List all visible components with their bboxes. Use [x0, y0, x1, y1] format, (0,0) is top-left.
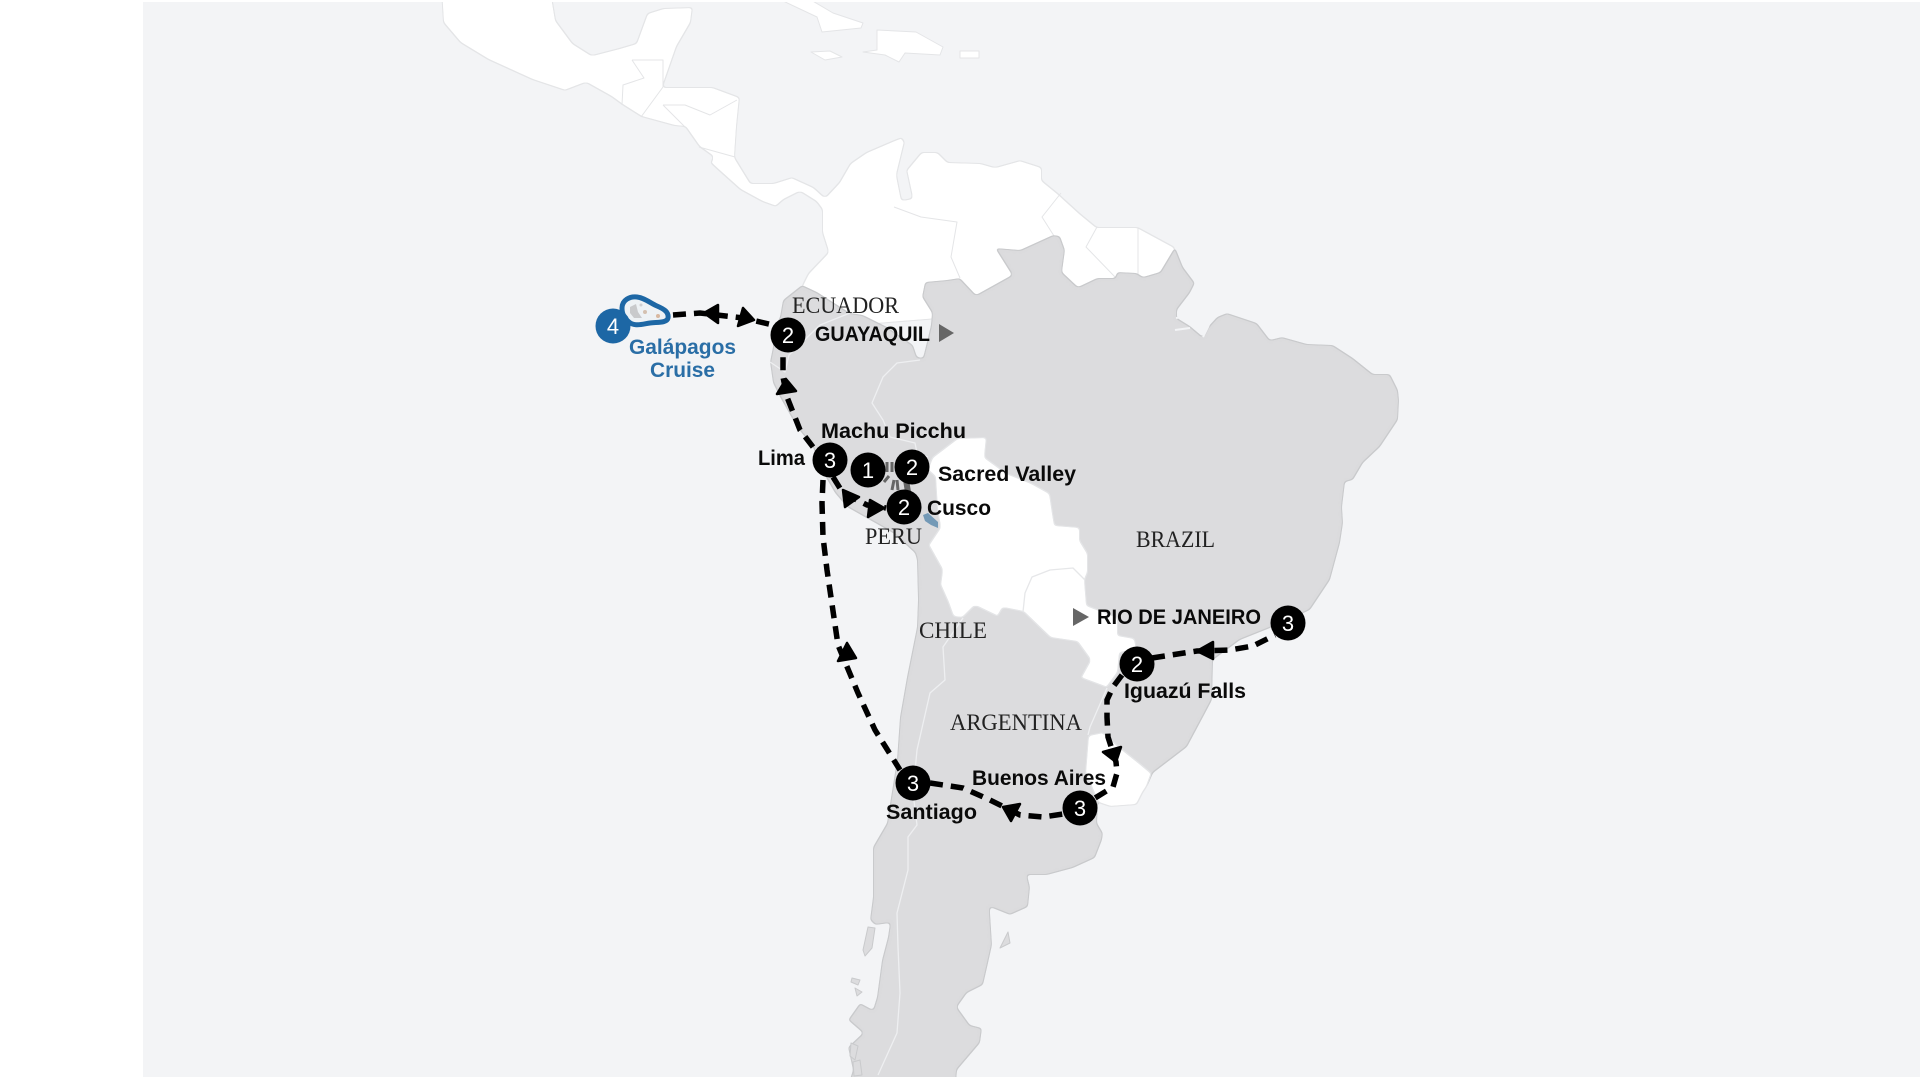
Patagonian islands: [863, 927, 1010, 956]
Lake Titicaca: [923, 513, 938, 528]
country labels: ARGENTINA: [950, 710, 1082, 735]
place labels: Sacred Valley: [938, 463, 1076, 486]
place labels: RIO DE JANEIRO: [1097, 606, 1261, 629]
country labels: BRAZIL: [1136, 527, 1215, 552]
leg: Buenos Aires to Santiago: [930, 783, 1063, 817]
leg: Iguazu to Buenos Aires: [1095, 675, 1122, 798]
South America grey countries: [770, 235, 1399, 1080]
Galapagos Cruise label: Galápagos: [629, 336, 736, 359]
Uruguay: [1085, 732, 1152, 807]
route stops: 1: [862, 458, 874, 483]
leg: Lima to Guayaquil: [783, 352, 813, 447]
place labels: [758, 323, 1261, 824]
start and end markers: [939, 324, 1089, 626]
Amazon delta channels: [1175, 316, 1210, 338]
place labels: GUAYAQUIL: [815, 323, 930, 346]
route stops: [770, 318, 1306, 826]
Central America and northern South America: [441, 0, 1175, 330]
dashed route: [673, 313, 1275, 817]
place labels: Lima: [758, 447, 805, 470]
country labels: PERU: [865, 524, 922, 549]
Galapagos Cruise label: Cruise: [650, 359, 715, 382]
route stops: 3: [907, 771, 919, 796]
route stops: 2: [898, 495, 910, 520]
icon: Galapagos islands: [596, 297, 668, 344]
Cuba: [781, 0, 863, 32]
route stops: 3: [824, 448, 836, 473]
route stops: 2: [782, 323, 794, 348]
route stops: 3: [1282, 611, 1294, 636]
route stops: 2: [906, 455, 918, 480]
Jamaica: [811, 51, 842, 60]
leg: Guayaquil to Galapagos: [673, 313, 773, 325]
place labels: Buenos Aires: [972, 767, 1106, 790]
leg: Lima to Cusco: [833, 477, 886, 508]
leg: Santiago to Lima: [822, 480, 900, 770]
leg: Rio to Iguazu: [1152, 635, 1275, 658]
place labels: Santiago: [886, 801, 977, 824]
route arrowheads: [704, 305, 1213, 821]
country borders: [770, 313, 1107, 1075]
Galapagos Cruise label: [629, 336, 736, 382]
country labels: CHILE: [919, 618, 987, 643]
Puerto Rico: [960, 51, 979, 58]
route stops: 3: [1074, 796, 1086, 821]
Hispaniola: [863, 30, 943, 62]
Bolivia and Paraguay: [927, 437, 1137, 688]
base map land: [441, 0, 1399, 1080]
route stops: 2: [1131, 652, 1143, 677]
country labels: [792, 293, 1215, 735]
place labels: Iguazú Falls: [1124, 680, 1246, 703]
place labels: Cusco: [927, 497, 991, 520]
stop 4: 4: [607, 314, 619, 339]
Machu Picchu spokes: [884, 462, 908, 492]
place labels: Machu Picchu: [821, 420, 966, 443]
country labels: ECUADOR: [792, 293, 900, 318]
Central American and northern borders: [622, 60, 1138, 287]
